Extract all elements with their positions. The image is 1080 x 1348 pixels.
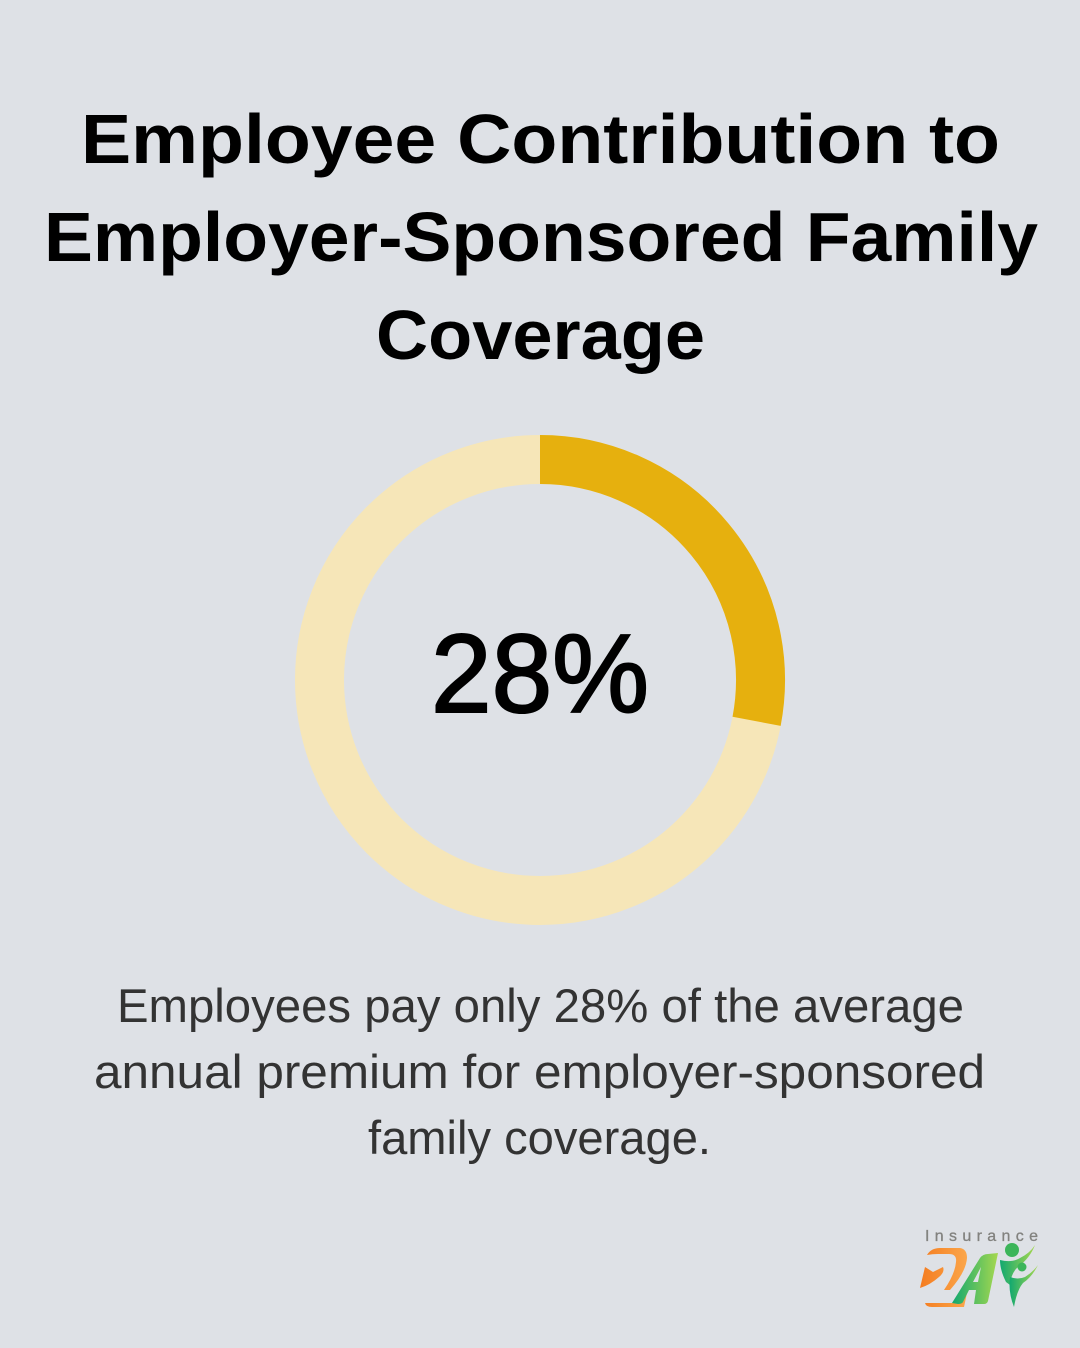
logo wordmark: Insurance <box>925 1228 1038 1245</box>
description text: family coverage. <box>368 1111 711 1164</box>
title: Coverage <box>376 296 705 374</box>
donut chart: 28% <box>320 460 761 900</box>
description text: Employees pay only 28% of the average <box>117 979 964 1032</box>
logo green A <box>952 1253 998 1304</box>
logo orange 2 <box>920 1248 967 1307</box>
logo people figures <box>1005 1243 1019 1257</box>
logo: Insurance 2A <box>920 1228 1038 1307</box>
description text: annual premium for employer-sponsored <box>94 1045 985 1098</box>
title: Employee Contribution to <box>81 100 1000 178</box>
description text <box>94 979 985 1164</box>
donut value arc <box>540 460 761 721</box>
center value: 28% <box>431 612 649 736</box>
donut track <box>320 460 760 900</box>
title <box>44 100 1038 374</box>
title: Employer-Sponsored Family <box>44 198 1038 276</box>
